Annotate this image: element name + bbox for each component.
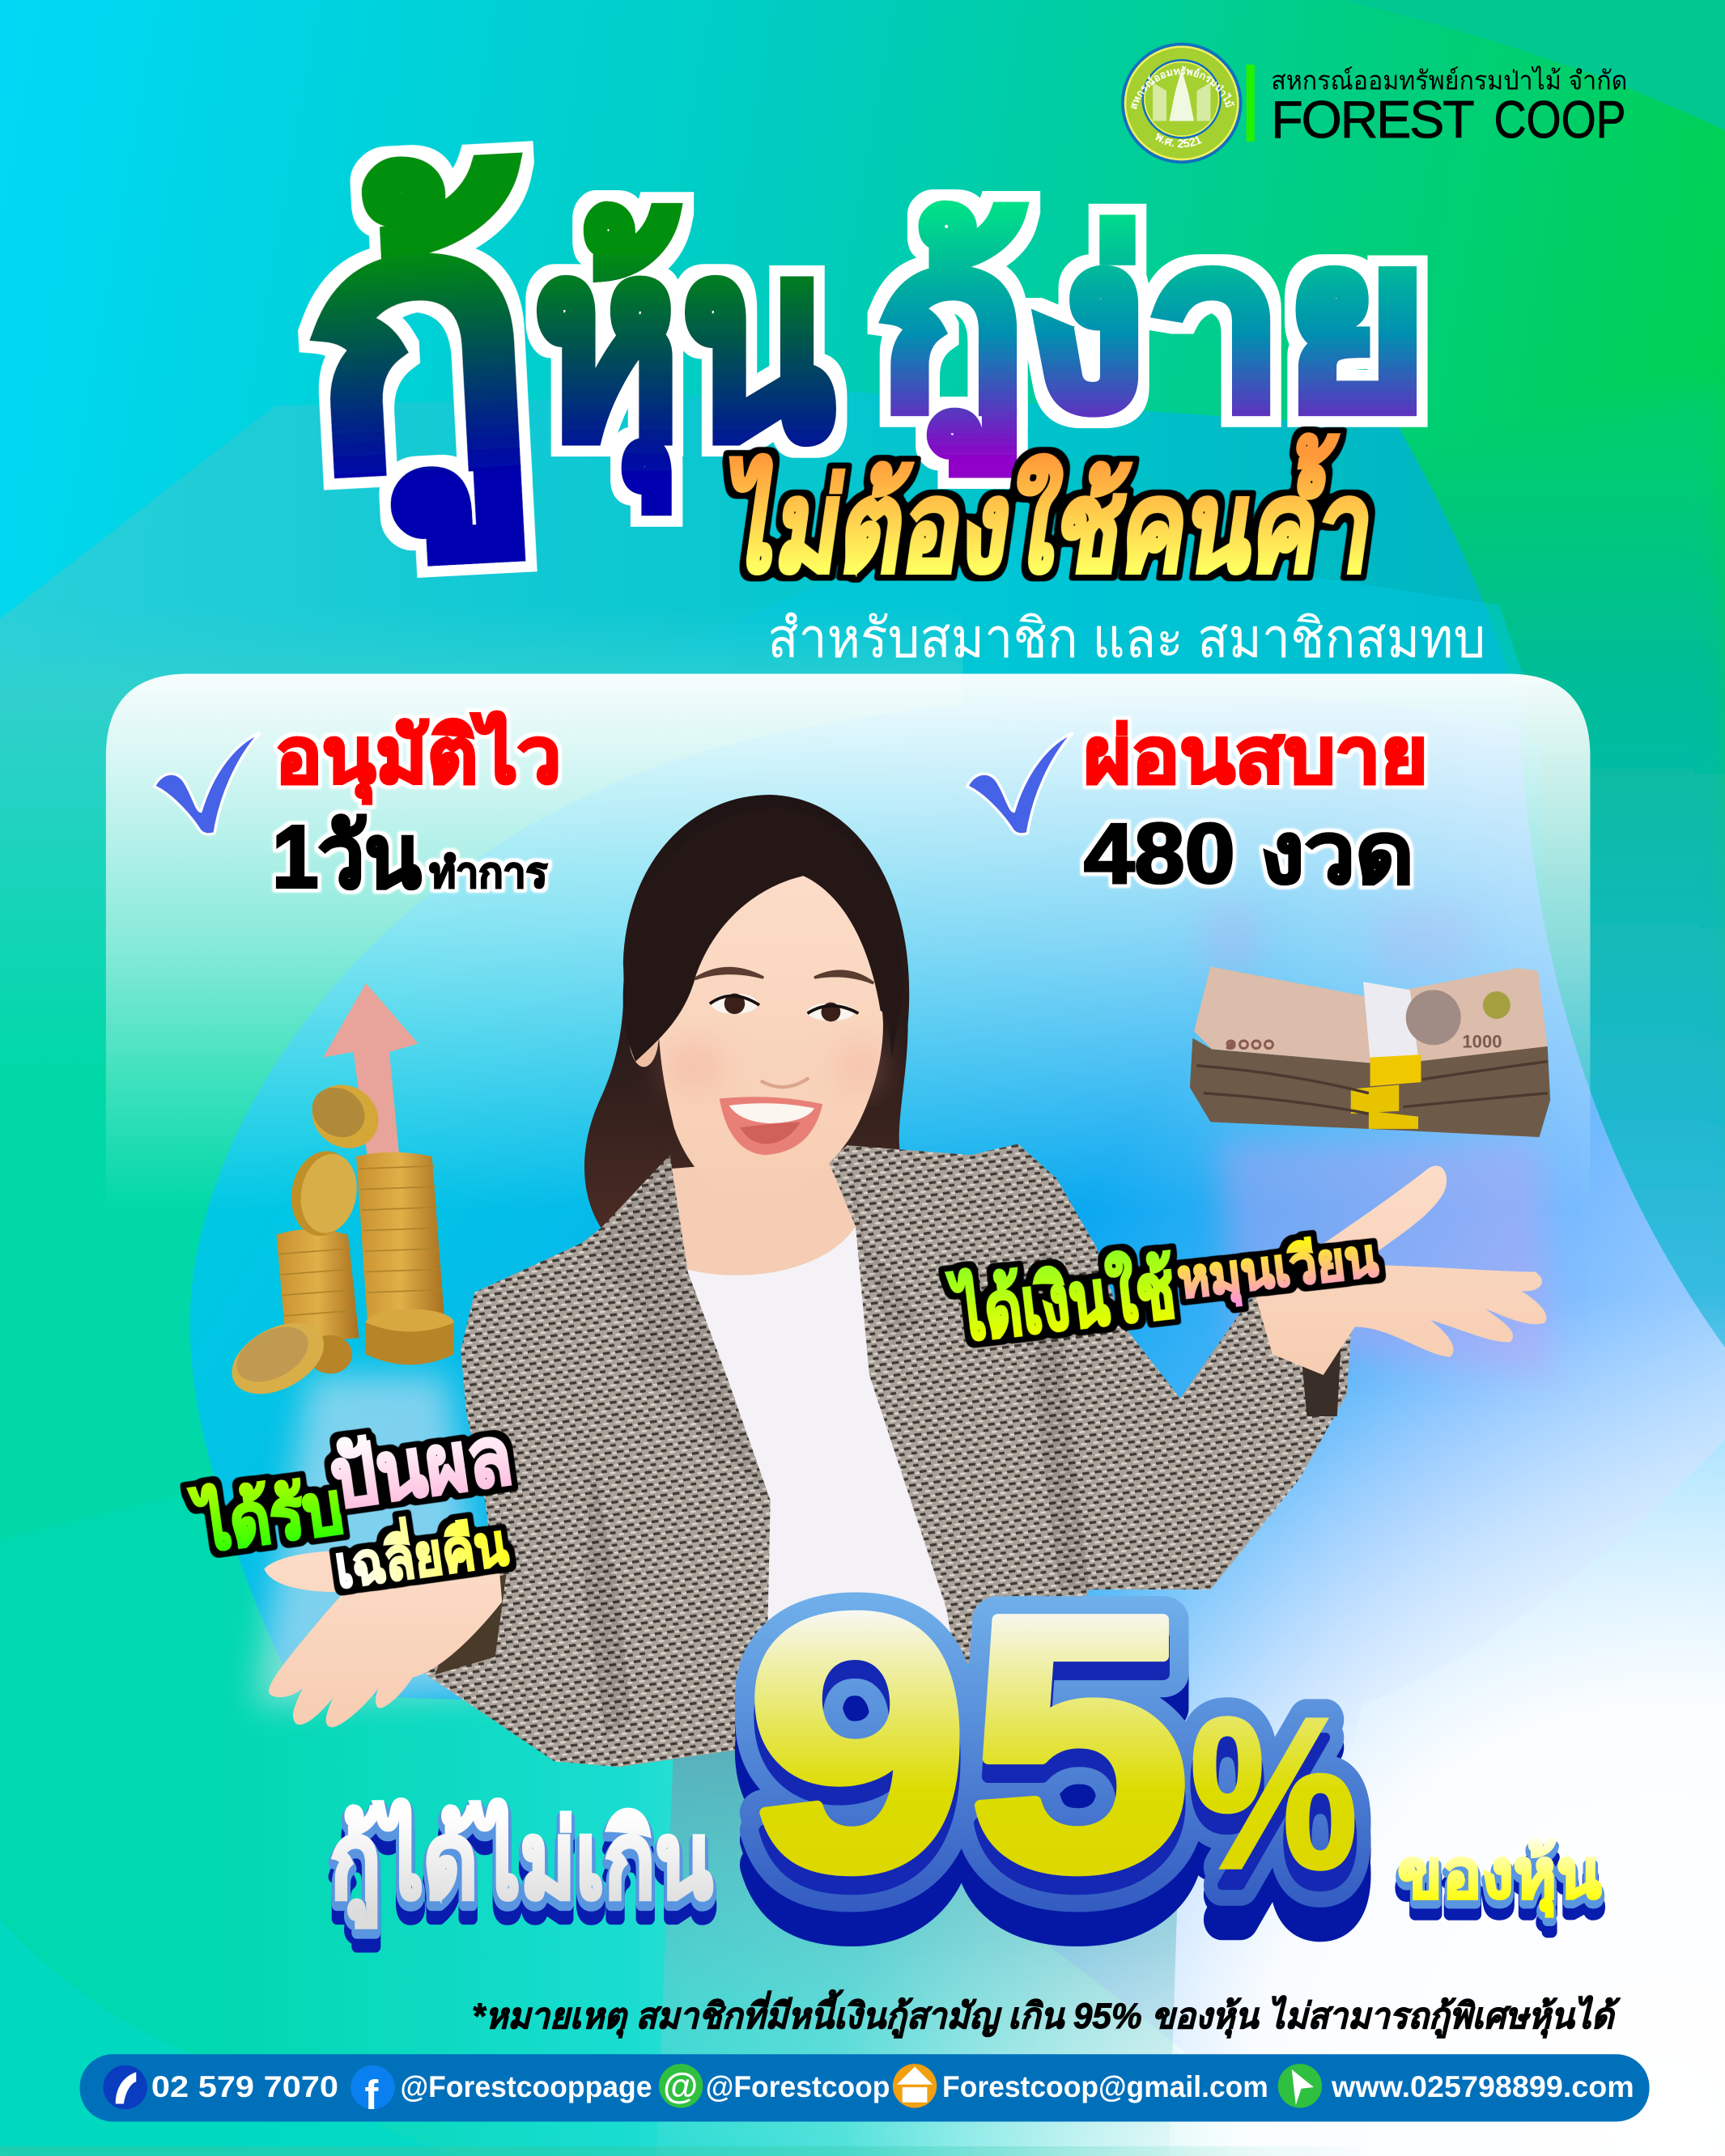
logo: สหกรณ์ออมทรัพย์กรมป่าไม้ [1131, 66, 1235, 109]
bottom edge tint [0, 2146, 1375, 2156]
figure: 95%: % [1190, 1674, 1357, 1913]
figure: 95%: % [1190, 1691, 1357, 1931]
loan text: กู้ได้ไม่เกิน: กู้ได้ไม่เกิน [330, 1818, 712, 1946]
line handle: @Forestcoop [706, 2069, 890, 2103]
logo [1121, 42, 1242, 163]
loan text: ของหุ้น: ของหุ้น [1398, 1841, 1601, 1922]
title: กู้หุ้น กู้ง่าย: กู้ง่าย [877, 193, 1428, 473]
white corner glow [688, 1237, 1725, 2156]
loan text: กู้ได้ไม่เกิน [330, 1799, 712, 1946]
title: กู้หุ้น กู้ง่าย: หุ้น [533, 193, 835, 511]
eyebrows [695, 968, 873, 983]
blazer body left [419, 1155, 771, 1767]
benefit: repayment: ผ่อนสบาย [1084, 714, 1428, 800]
icon: facebook: f [364, 2072, 379, 2118]
label: ได้เงินใช้หมุนเวียน: ได้เงินใช้ [945, 1246, 1179, 1358]
logo wordmark: COOP [1494, 91, 1626, 149]
lapel shading [592, 1155, 771, 1500]
logo wordmark: สหกรณ์ออมทรัพย์กรมป่าไม้ จำกัด [1271, 65, 1627, 95]
benefit: approval: ทำการ [429, 850, 548, 896]
benefit: repayment: 480 งวด [1084, 807, 1414, 902]
footnote: *หมายเหตุ สมาชิกที่มีหนี้เงินกู้สามัญ เกิน 95% ของหุ้น ไม่สามารถกู้พิเศษหุ้นได้ [472, 1989, 1621, 2039]
logo wordmark: FOREST [1271, 91, 1475, 149]
check icon right [967, 733, 1073, 834]
icon: banknote stack [1190, 966, 1550, 1137]
icon: phone [103, 2065, 147, 2109]
title: กู้หุ้น กู้ง่าย: กู้ [294, 136, 543, 568]
ear [629, 1001, 659, 1067]
face [657, 873, 883, 1203]
icon: banknote stack: ๑๐๐๐ [1224, 1031, 1275, 1054]
coin speed trails [254, 1375, 495, 1705]
woman photo illustration [264, 795, 1546, 2156]
logo: พ.ศ. 2521 [1155, 133, 1203, 147]
hand right [1255, 1165, 1546, 1375]
blazer body right [828, 1144, 1351, 1664]
facebook handle: @Forestcooppage [401, 2069, 652, 2103]
figure: 95%: 95 [747, 1560, 1190, 1962]
lower teal wash [0, 1485, 1306, 2156]
cuff inner [435, 1574, 506, 1674]
benefit: approval: 1วัน [272, 808, 421, 906]
email address: Forestcoop@gmail.com [942, 2069, 1268, 2103]
icon: rising arrow [323, 983, 419, 1157]
icon: email home [893, 2064, 937, 2108]
panel: white rounded card [106, 673, 1590, 1210]
label: ได้รับปันผลเฉลี่ยคืน: ได้รับ [188, 1466, 347, 1567]
loan text: กู้ได้ไม่เกิน: กู้ได้ไม่เกิน [330, 1804, 712, 1933]
icon: banknote stack: 1000 [1462, 1032, 1502, 1052]
icon: facebook [351, 2065, 395, 2118]
label: ได้เงินใช้หมุนเวียน [945, 1223, 1383, 1358]
label: ได้รับปันผลเฉลี่ยคืน [183, 1408, 528, 1619]
figure: 95%: 95 [747, 1542, 1190, 1944]
figure: 95%: 95 [747, 1542, 1190, 1944]
money speed trails [1204, 907, 1554, 1375]
label: ได้รับปันผลเฉลี่ยคืน: ปันผล [325, 1408, 517, 1525]
eyes [710, 994, 858, 1021]
website: www.025798899.com [1331, 2069, 1634, 2103]
hair back [584, 795, 909, 1228]
white shirt [681, 1226, 963, 1767]
label: ได้เงินใช้หมุนเวียน: หมุนเวียน [1175, 1229, 1381, 1313]
check icon left [154, 733, 260, 834]
loan text: ของหุ้น: ของหุ้น [1398, 1836, 1601, 1917]
figure: 95%: 95 [747, 1594, 1190, 1997]
figure: 95%: % [1190, 1691, 1357, 1931]
figure: 95%: % [1190, 1701, 1357, 1941]
hand left [264, 1551, 502, 1727]
contact bar [80, 2054, 1650, 2122]
hair front [623, 808, 903, 1062]
subtitle: ไม่ต้องใช้คนค้ำ: ไม่ต้องใช้คนค้ำ [711, 435, 1387, 598]
audience line: สำหรับสมาชิก และ สมาชิกสมทบ [767, 608, 1485, 669]
mouth [720, 1097, 822, 1155]
icon: gold coins [220, 1072, 454, 1408]
jeans [656, 1719, 1183, 2156]
cheeks [665, 1041, 882, 1090]
benefit: approval [272, 712, 561, 906]
right sky wedge [1238, 1440, 1725, 2156]
benefit: approval: อนุมัติไว [275, 712, 561, 804]
loan text: ของหุ้น: ของหุ้น [1398, 1853, 1601, 1933]
icon: web cursor [1278, 2064, 1322, 2108]
neck [670, 1155, 860, 1300]
icon: line: @ [663, 2067, 698, 2107]
loan text: กู้ได้ไม่เกิน: กู้ได้ไม่เกิน [330, 1799, 712, 1928]
lower left corner curve [0, 1920, 454, 2156]
benefit: repayment [1084, 714, 1428, 902]
big blue blob [190, 694, 1725, 2156]
figure: 95%: 95 [747, 1569, 1190, 1971]
figure: 95% [747, 1542, 1357, 1997]
figure: 95%: 95 [747, 1560, 1190, 1962]
sleeve seam shading [584, 1210, 1090, 1735]
title: กู้หุ้น กู้ง่าย [294, 136, 1428, 568]
label: ได้รับปันผลเฉลี่ยคืน: เฉลี่ยคืน [329, 1504, 512, 1600]
logo wordmark [1271, 65, 1627, 149]
figure: 95%: % [1190, 1674, 1357, 1913]
figure: 95%: % [1190, 1726, 1357, 1966]
logo divider [1247, 65, 1255, 142]
phone number: 02 579 7070 [151, 2069, 338, 2103]
nose [761, 1078, 809, 1087]
